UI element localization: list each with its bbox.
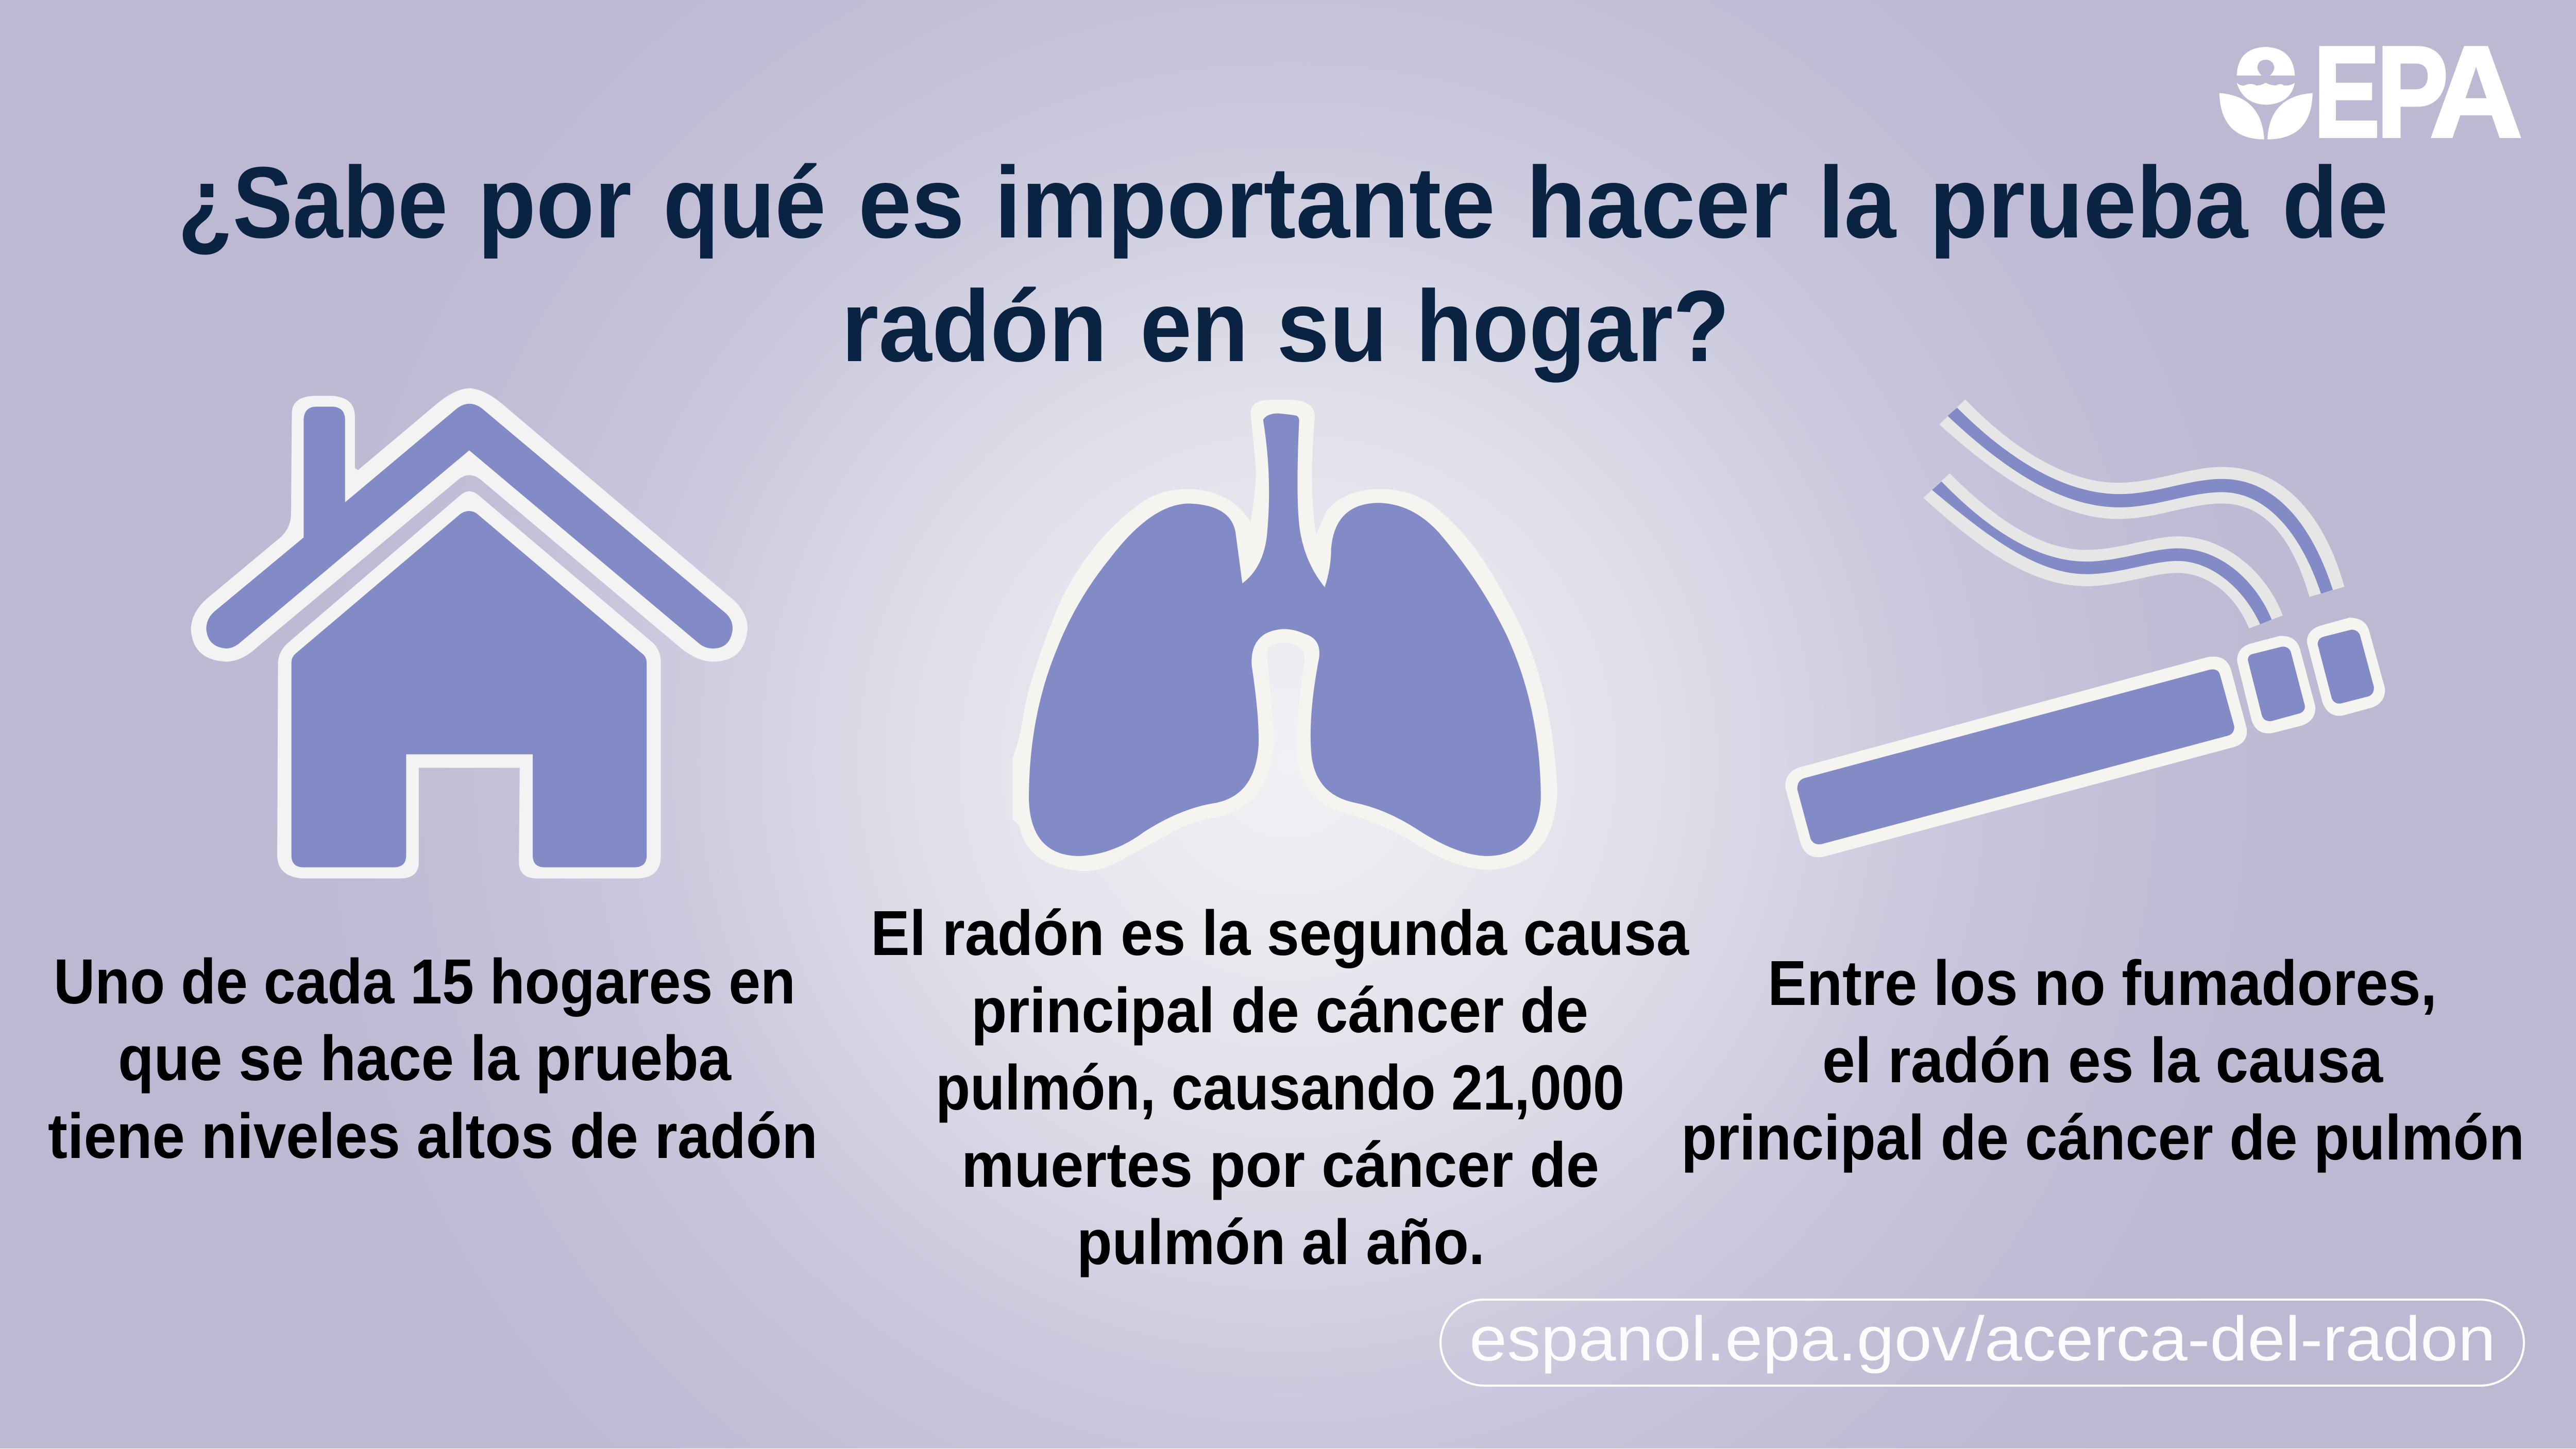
title: la	[1818, 146, 1896, 259]
text block: right statistic: principal de cáncer de pulmón	[1681, 1103, 2524, 1173]
text block: left statistic: que se hace la prueba	[118, 1024, 732, 1094]
logo wordmark: P	[2377, 20, 2448, 164]
icon: lungs	[1012, 400, 1557, 871]
callout: website link pill: espanol.epa.gov/acerca-del-radon	[1469, 1304, 2496, 1374]
text block: left statistic: Uno de cada 15 hogares en	[54, 947, 795, 1017]
title: ¿Sabe	[178, 146, 448, 259]
text block: left statistic	[48, 947, 818, 1172]
text block: center statistic: principal de cáncer de	[971, 976, 1588, 1046]
text block: center statistic	[871, 898, 1689, 1278]
title: de	[2282, 146, 2388, 259]
title: por	[478, 146, 632, 259]
title	[178, 146, 2388, 383]
house roof and chimney	[191, 388, 748, 661]
text block: center statistic: muertes por cáncer de	[961, 1130, 1599, 1201]
smoke: upper	[1939, 400, 2344, 597]
text block: center statistic: El radón es la segunda causa	[871, 898, 1689, 969]
cigarette segment 2	[2307, 618, 2385, 716]
text block: center statistic: pulmón, causando 21,000	[936, 1053, 1624, 1123]
logo: EPA	[2219, 20, 2522, 164]
text block: right statistic: Entre los no fumadores,	[1768, 948, 2437, 1019]
logo wordmark: E	[2314, 20, 2380, 164]
smoke: lower	[1923, 473, 2283, 628]
title: hogar?	[1416, 269, 1730, 383]
title: qué	[663, 146, 826, 259]
icon: house	[191, 388, 748, 878]
icon: cigarette with smoke	[1785, 400, 2385, 857]
title: hacer	[1526, 146, 1788, 259]
title: importante	[994, 146, 1495, 259]
icon: EPA flower mark	[2219, 47, 2313, 140]
logo wordmark: A	[2430, 20, 2522, 164]
title: su	[1277, 269, 1387, 383]
cigarette body	[1785, 657, 2247, 857]
title: en	[1140, 269, 1248, 383]
text block: center statistic: pulmón al año.	[1077, 1207, 1485, 1278]
title: prueba	[1929, 146, 2248, 259]
title: radón	[841, 269, 1107, 383]
title: es	[858, 146, 964, 259]
cigarette segment 1	[2237, 636, 2315, 734]
house body with door	[277, 491, 661, 878]
logo wordmark	[2314, 20, 2522, 164]
text block: right statistic	[1681, 948, 2524, 1173]
text block: left statistic: tiene niveles altos de radón	[48, 1101, 818, 1172]
text block: right statistic: el radón es la causa	[1822, 1026, 2383, 1096]
